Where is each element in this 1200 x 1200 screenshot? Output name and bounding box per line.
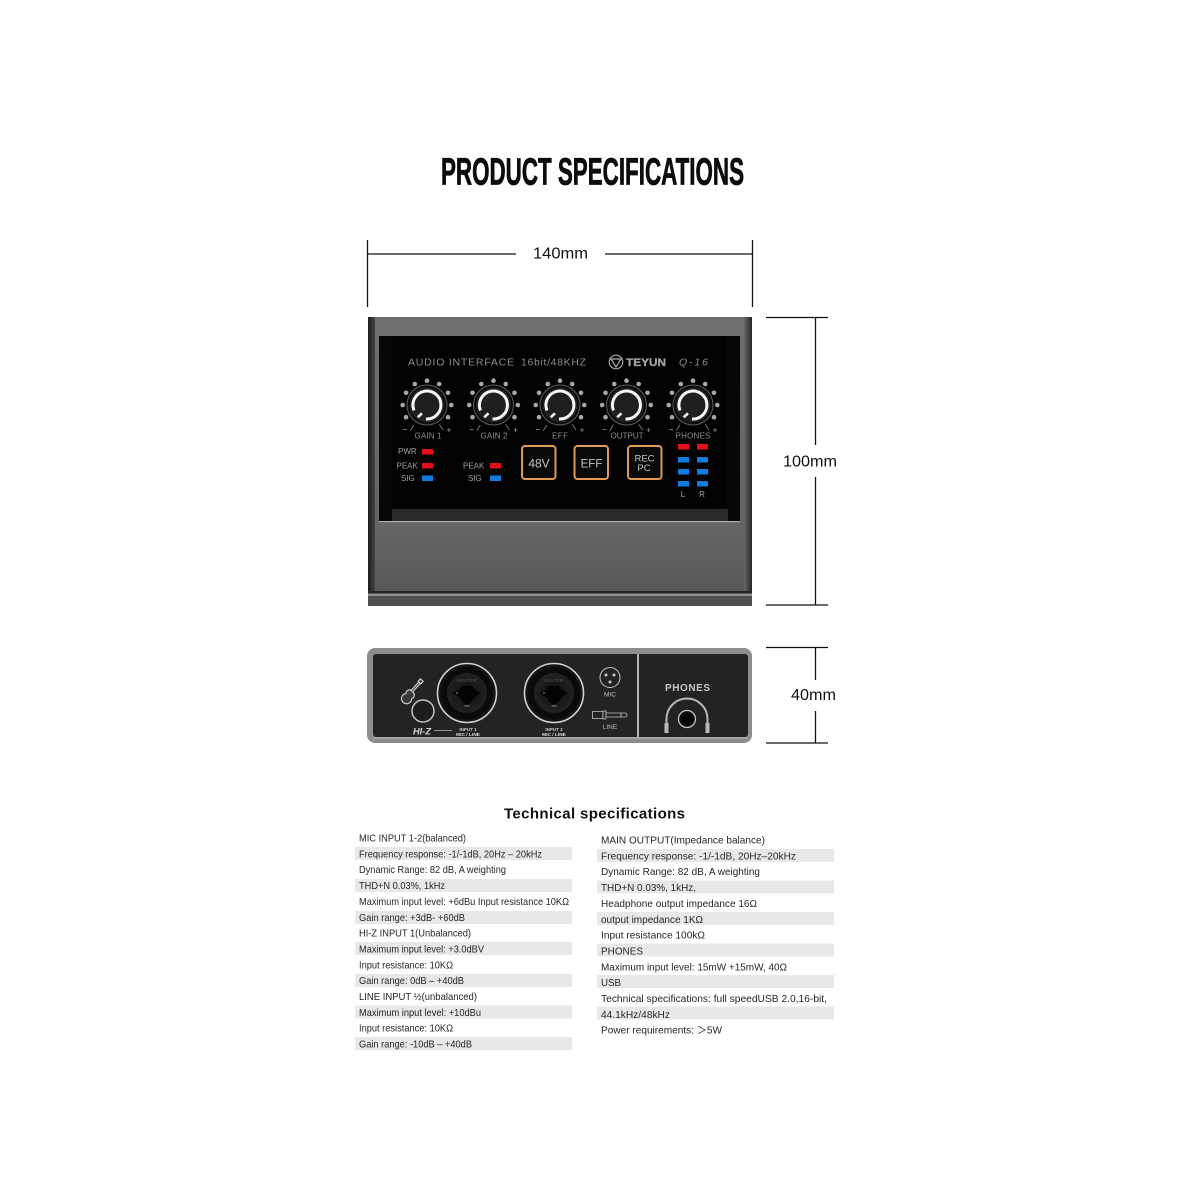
hi-z jack xyxy=(412,700,434,722)
icon: line jack xyxy=(592,711,627,731)
channel 2 indicators xyxy=(463,462,501,483)
knob: output: OUTPUT xyxy=(610,432,644,440)
spec table: outputs: USB xyxy=(601,977,621,989)
spec table: outputs: MAIN OUTPUT(Impedance balance) xyxy=(601,834,765,846)
knob: output xyxy=(600,378,653,440)
channel 1 indicators: SIG xyxy=(401,474,415,483)
knob: eff xyxy=(533,378,587,440)
channel 2 indicators: SIG xyxy=(468,474,482,483)
panel header text: AUDIO INTERFACE xyxy=(408,356,514,368)
spec table: inputs: Maximum input level: +6dBu Input resistance 10KΩ xyxy=(359,896,569,908)
brand logo: TEYUN xyxy=(626,357,666,369)
knob: gain 2: GAIN 2 xyxy=(480,432,508,440)
button: 48V xyxy=(522,446,556,479)
icon: line jack: LINE xyxy=(603,724,618,731)
spec table: outputs: THD+N 0.03%, 1kHz, xyxy=(601,882,696,894)
top view of audio interface xyxy=(368,317,752,606)
spec table: inputs: LINE INPUT ½(unbalanced) xyxy=(359,991,477,1003)
knob: phones: PHONES xyxy=(676,432,710,440)
spec table: inputs: Input resistance: 10KΩ xyxy=(359,959,453,971)
dimension: width 140mm: 140mm xyxy=(533,246,588,262)
button: REC PC xyxy=(628,446,662,479)
knob: gain 2 xyxy=(467,378,520,440)
button: REC PC: REC xyxy=(634,454,655,464)
spec table: outputs: Dynamic Range: 82 dB, A weighting xyxy=(601,866,760,878)
icon: xlr mic: MIC xyxy=(604,692,616,698)
dimension: height 100mm: 100mm xyxy=(783,454,837,470)
spec table: outputs: Frequency response: -1/-1dB, 20Hz–20kHz xyxy=(601,850,796,862)
output level meters xyxy=(678,444,708,499)
input 2 label: INPUT 2 xyxy=(545,727,563,732)
spec table: inputs: Gain range: +3dB- +60dB xyxy=(359,912,465,924)
spec table: outputs: Power requirements: ＞5W xyxy=(601,1025,722,1037)
output level meters: R xyxy=(699,490,705,499)
input 1 label: MIC / LINE xyxy=(456,732,481,738)
combo jack input 2: NEUTRIK xyxy=(544,678,564,683)
channel 1 indicators xyxy=(396,447,433,483)
spec table: inputs: Input resistance: 10KΩ xyxy=(359,1023,453,1035)
dimension: width 140mm xyxy=(368,240,752,307)
spec table: outputs: 44.1kHz/48kHz xyxy=(601,1009,670,1021)
spec table: inputs: THD+N 0.03%, 1kHz xyxy=(359,880,445,892)
knob: gain 1: GAIN 1 xyxy=(414,432,442,440)
spec table: inputs: MIC INPUT 1-2(balanced) xyxy=(359,832,466,844)
panel header text: 16bit/48KHZ xyxy=(521,356,587,368)
brand logo xyxy=(609,355,666,369)
rear view of audio interface xyxy=(367,648,752,743)
dimension: depth 40mm xyxy=(766,648,836,743)
button: EFF xyxy=(574,446,608,479)
button: EFF: EFF xyxy=(581,458,602,470)
spec table: inputs: Gain range: -10dB – +40dB xyxy=(359,1039,472,1051)
button: 48V: 48V xyxy=(528,456,550,470)
icon: xlr mic xyxy=(600,668,620,698)
output level meters: L xyxy=(681,490,686,499)
title: PRODUCT SPECIFICATIONS xyxy=(441,152,744,194)
phones label: PHONES xyxy=(665,683,710,694)
input 2 label xyxy=(542,727,567,738)
dimension: depth 40mm: 40mm xyxy=(791,687,836,704)
spec table: outputs: Headphone output impedance 16Ω xyxy=(601,898,757,910)
spec table: inputs: Gain range: 0dB – +40dB xyxy=(359,975,464,987)
panel header text: Q-16 xyxy=(679,356,708,368)
spec table: inputs: Dynamic Range: 82 dB, A weighting xyxy=(359,864,506,876)
spec table: inputs: Frequency response: -1/-1dB, 20Hz – 20kHz xyxy=(359,848,542,860)
knob: gain 1 xyxy=(400,378,454,440)
spec table: outputs: output impedance 1KΩ xyxy=(601,914,703,926)
button: REC PC: PC xyxy=(637,463,651,474)
spec table: outputs: Technical specifications: full speedUSB 2.0,16-bit, xyxy=(601,993,827,1005)
spec table: outputs xyxy=(597,834,834,1037)
spec table: outputs: Maximum input level: 15mW +15mW, 40Ω xyxy=(601,961,787,973)
channel 1 indicators: PWR xyxy=(398,447,417,456)
combo jack input 2 xyxy=(524,664,584,722)
technical specifications heading: Technical specifications xyxy=(504,806,685,822)
hi-z label xyxy=(413,726,452,736)
icon: guitar xyxy=(399,677,426,706)
combo jack input 1 xyxy=(438,664,496,722)
knob: phones xyxy=(666,378,720,440)
spec table: outputs: PHONES xyxy=(601,946,643,958)
spec table: outputs: Input resistance 100kΩ xyxy=(601,930,705,942)
input 1 label: INPUT 1 xyxy=(459,727,477,732)
spec table: inputs: Maximum input level: +3.0dBV xyxy=(359,944,484,956)
channel 1 indicators: PEAK xyxy=(396,462,419,470)
input 2 label: MIC / LINE xyxy=(542,732,567,738)
input 1 label xyxy=(456,727,481,738)
dimension: height 100mm xyxy=(766,318,837,605)
hi-z label: HI-Z xyxy=(413,726,432,736)
spec table: inputs: Maximum input level: +10dBu xyxy=(359,1007,481,1019)
channel 2 indicators: PEAK xyxy=(463,462,485,470)
spec table: inputs xyxy=(355,832,572,1051)
spec table: inputs: HI-Z INPUT 1(Unbalanced) xyxy=(359,928,471,940)
panel header text xyxy=(408,356,708,368)
knob: eff: EFF xyxy=(552,432,568,440)
icon: headphone jack xyxy=(664,698,710,733)
combo jack input 1: NEUTRIK xyxy=(457,678,477,683)
